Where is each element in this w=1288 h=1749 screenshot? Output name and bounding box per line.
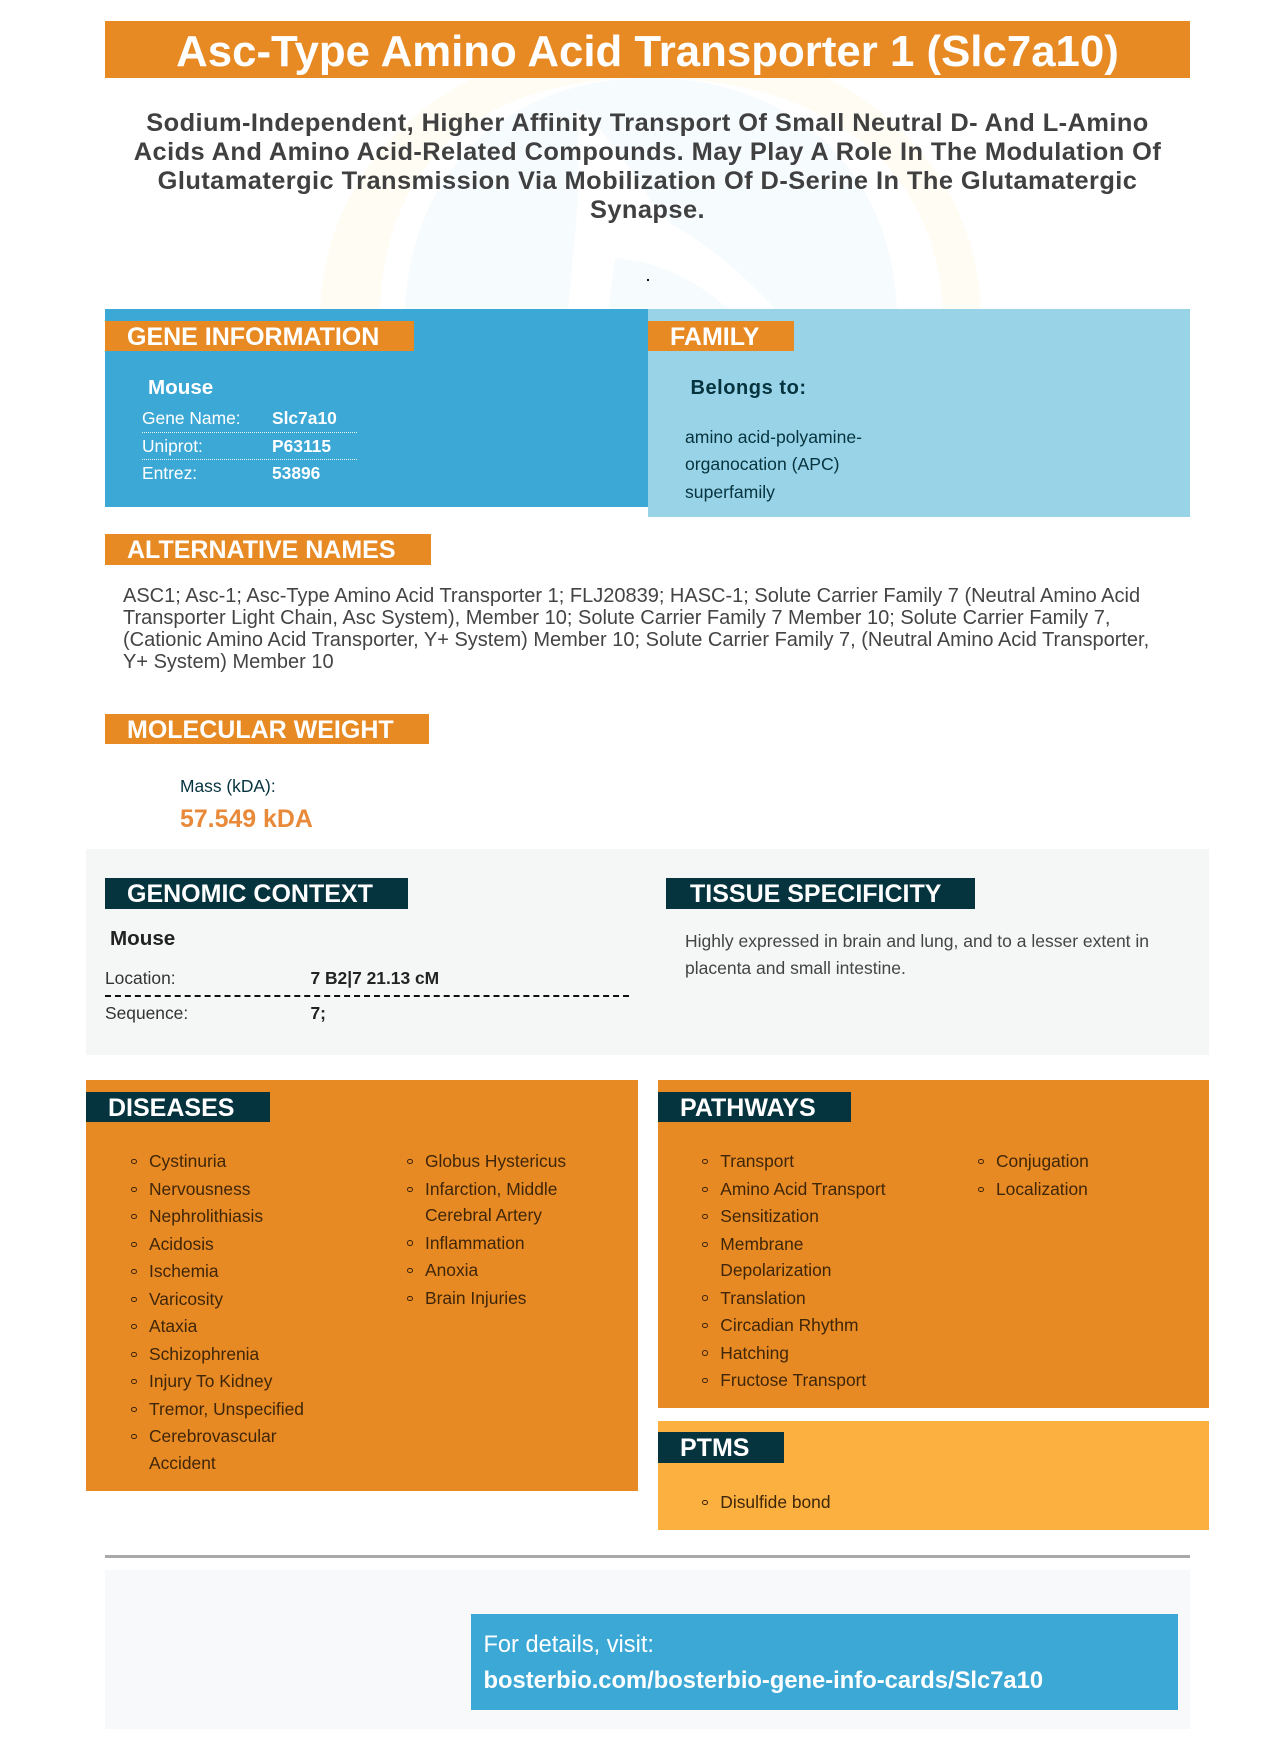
tissue specificity text: placenta and small intestine. [685,958,906,978]
callout url: bosterbio.com/bosterbio-gene-info-cards/Slc7a10 [484,1667,1043,1694]
tissue specificity text: Highly expressed in brain and lung, and to a lesser extent in [685,931,1149,951]
disease list: Acidosis [149,1234,214,1254]
species label: Mouse [110,927,175,950]
subtitle description [134,109,1161,224]
heading: ptms [658,1432,784,1463]
disease list: Nephrolithiasis [149,1206,263,1226]
panel: gene information [105,309,648,507]
pathway list: Circadian Rhythm [720,1315,859,1335]
heading: diseases: DISEASES [108,1094,234,1122]
panel: pathways [658,1080,1209,1408]
heading: family [648,321,794,351]
pathway list: Translation [720,1288,806,1308]
disease list [131,1151,566,1473]
watermark logo [320,78,980,309]
disease list: Globus Hystericus [425,1151,566,1171]
heading: pathways: PATHWAYS [680,1094,816,1122]
ptm list: Disulfide bond [720,1492,831,1512]
heading: pathways [658,1092,851,1122]
subtitle description: Sodium-Independent, Higher Affinity Transport Of Small Neutral D- And L-Amino [146,109,1149,137]
disease list: Varicosity [149,1289,223,1309]
location row: Location: [105,968,176,988]
pathway list: Membrane [720,1234,803,1254]
stray dot [647,279,649,281]
panel: family [648,309,1190,517]
family description: organocation (APC) [685,454,840,474]
entrez row: Entrez: [142,463,197,483]
species label: Mouse [148,376,213,399]
panel: genomic context and tissue specificity: 7 B2|7 21.13 cM [310,968,439,988]
disease list: Infarction, Middle [425,1179,557,1199]
alternative names text: (Cationic Amino Acid Transporter, Y+ System) Member 10; Solute Carrier Family 7, (Neutral Amino Acid Transporter, [123,629,1149,651]
disease list: Ischemia [149,1261,219,1281]
tissue specificity text [685,931,1149,978]
family description: amino acid-polyamine- [685,427,862,447]
alternative names text: ASC1; Asc-1; Asc-Type Amino Acid Transporter 1; FLJ20839; HASC-1; Solute Carrier Family 7 (Neutral Amino Acid [123,585,1140,607]
gene name row: Gene Name: [142,408,241,428]
family description [685,427,862,502]
disease list: Ataxia [149,1316,197,1336]
subtitle description: Acids And Amino Acid-Related Compounds. May Play A Role In The Modulation Of [134,138,1161,166]
pathway list: Transport [720,1151,794,1171]
disease list: Brain Injuries [425,1288,526,1308]
panel: gene information: 53896 [272,463,320,483]
subtitle description: Synapse. [590,196,705,224]
pathway list: Amino Acid Transport [720,1179,886,1199]
pathway list: Localization [996,1179,1088,1199]
disease list: Injury To Kidney [149,1371,272,1391]
mass value: 57.549 kDA [180,805,313,833]
panel: diseases [86,1080,638,1491]
heading: ptms: PTMS [680,1434,749,1462]
disease list: Cystinuria [149,1151,226,1171]
disease list: Inflammation [425,1232,525,1252]
heading: alternative names: ALTERNATIVE NAMES [127,536,396,564]
pathway list: Hatching [720,1342,789,1362]
panel: genomic context and tissue specificity: 7; [310,1003,326,1023]
heading: tissue specificity: TISSUE SPECIFICITY [690,880,941,908]
pathway list: Conjugation [996,1151,1089,1171]
panel: gene information: Slc7a10 [272,408,337,428]
family description: superfamily [685,482,775,502]
callout label: For details, visit: [484,1632,654,1658]
alternative names text: Y+ System) Member 10 [123,651,334,673]
mass label: Mass (kDA): [180,776,276,796]
pathway list: Sensitization [720,1206,819,1226]
disease list: Accident [149,1453,216,1473]
title text: Asc-Type Amino Acid Transporter 1 (Slc7a10) [176,27,1119,76]
panel: footer [105,1570,1190,1729]
footer rule [105,1555,1190,1558]
disease list: Nervousness [149,1179,250,1199]
pathway list: Depolarization [720,1260,831,1280]
disease list: Anoxia [425,1260,478,1280]
disease list: Schizophrenia [149,1344,259,1364]
heading: molecular weight: MOLECULAR WEIGHT [127,716,394,744]
pathway list [702,1151,1089,1390]
title banner [105,21,1190,78]
disease list: Tremor, Unspecified [149,1399,304,1419]
alternative names text: Transporter Light Chain, Asc System), Member 10; Solute Carrier Family 7 Member 10; Solute Carrier Family 7, [123,607,1110,629]
panel: gene information: P63115 [272,436,331,456]
disease list: Cerebrovascular [149,1426,277,1446]
panel: genomic context and tissue specificity [86,849,1209,1055]
callout: details link [471,1614,1178,1710]
pathway list: Fructose Transport [720,1370,866,1390]
subtitle description: Glutamatergic Transmission Via Mobilization Of D-Serine In The Glutamatergic [158,167,1137,195]
heading: genomic context: GENOMIC CONTEXT [127,880,373,908]
disease list: Cerebral Artery [425,1205,542,1225]
uniprot row: Uniprot: [142,436,203,456]
sequence row: Sequence: [105,1003,188,1023]
heading: family: FAMILY [670,323,759,351]
belongs to label: Belongs to: [690,377,807,399]
panel: ptms [658,1421,1209,1530]
heading: gene information: GENE INFORMATION [127,323,379,351]
alternative names text [123,585,1149,673]
heading: diseases [86,1092,270,1122]
